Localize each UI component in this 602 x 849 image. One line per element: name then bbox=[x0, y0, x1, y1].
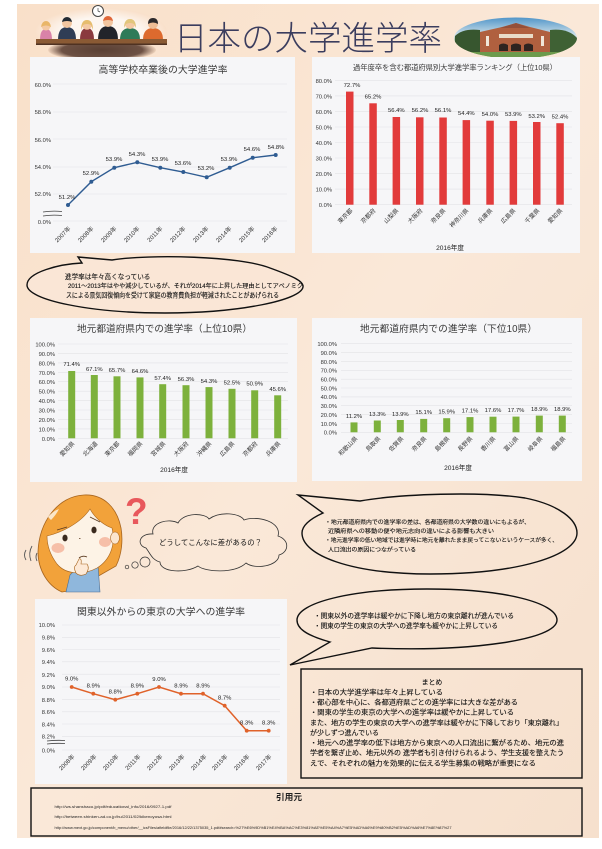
x axis labels: 2012年 bbox=[168, 225, 187, 244]
x axis labels: 愛知県 bbox=[58, 440, 76, 458]
y axis labels: 56.0% bbox=[35, 138, 51, 144]
panel: summary: えで、それぞれの魅力を効果的に伝える学生募集の戦略が重要になる bbox=[310, 758, 536, 768]
chart title: 過年度卒を含む都道府県別大学進学率ランキング（上位10県） bbox=[353, 63, 557, 72]
x axis labels: 2009年 bbox=[79, 753, 98, 772]
x axis labels: 2010年 bbox=[101, 753, 120, 772]
x axis labels: 鳥取県 bbox=[364, 435, 382, 453]
data labels: 72.7% bbox=[344, 83, 361, 89]
y axis labels: 8.8% bbox=[42, 698, 55, 704]
axis break mark bbox=[43, 211, 62, 216]
callout: regional differences: 人口流出の原因につながっている bbox=[328, 546, 416, 554]
data labels: 17.7% bbox=[508, 408, 525, 414]
y axis labels: 9.6% bbox=[42, 648, 55, 654]
x axis labels bbox=[336, 207, 564, 229]
y axis labels bbox=[317, 342, 337, 437]
x axis labels bbox=[337, 435, 567, 457]
y axis labels: 9.0% bbox=[42, 685, 55, 691]
data labels: 65.2% bbox=[365, 95, 382, 101]
x axis labels: 広島県 bbox=[218, 440, 236, 458]
y axis labels: 60.0% bbox=[39, 380, 55, 386]
x axis labels: 2008年 bbox=[76, 225, 95, 244]
x axis labels: 京都府 bbox=[241, 440, 259, 458]
x axis labels: 東京都 bbox=[103, 440, 121, 458]
data labels: 8.9% bbox=[174, 684, 188, 690]
y axis labels: 70.0% bbox=[39, 371, 55, 377]
y axis labels: 60.0% bbox=[321, 378, 337, 384]
y axis labels: 80.0% bbox=[321, 360, 337, 366]
y axis labels: 8.2% bbox=[42, 735, 55, 741]
x axis labels: 2016年 bbox=[232, 753, 251, 772]
y axis labels: 0.0% bbox=[319, 203, 332, 209]
x axis labels: 2015年 bbox=[210, 753, 229, 772]
people bbox=[40, 16, 163, 40]
data labels: 17.6% bbox=[485, 408, 502, 414]
y axis labels bbox=[35, 83, 51, 226]
data labels: 67.1% bbox=[86, 367, 103, 373]
panel: references: http://between.shinken-ad.co.jp/hu/2011/02/kikencyosa.html bbox=[54, 814, 172, 819]
data labels: 53.9% bbox=[106, 157, 123, 163]
data labels: 15.9% bbox=[438, 410, 456, 416]
blush bbox=[52, 543, 64, 553]
x axis labels: 和歌山県 bbox=[337, 435, 359, 457]
data labels: 56.1% bbox=[435, 108, 452, 114]
data labels: 52.9% bbox=[83, 171, 100, 177]
x axis labels: 千葉県 bbox=[523, 207, 541, 225]
data labels: 53.2% bbox=[198, 166, 215, 172]
y axis labels: 20.0% bbox=[316, 172, 332, 178]
illustration: thinking girl bbox=[24, 495, 122, 592]
x axis labels: 広島県 bbox=[499, 207, 517, 225]
panel: summary: また、地方の学生の東京の大学への進学率は緩やかに下降しており「東京離れ」 bbox=[310, 718, 563, 727]
data labels: 64.6% bbox=[132, 369, 149, 375]
y axis labels: 8.4% bbox=[42, 722, 55, 728]
callout: regional differences: ・地元都道府県内での進学率の差は、各都道府県の大学数の違いにもよるが、 bbox=[325, 518, 530, 526]
icon: clock bbox=[92, 6, 104, 16]
data labels bbox=[63, 362, 287, 393]
y axis labels: 100.0% bbox=[317, 342, 337, 348]
panel: references bbox=[31, 788, 582, 836]
x axis labels: 長野県 bbox=[456, 435, 474, 453]
data labels: 8.9% bbox=[196, 684, 210, 690]
illustration: university building bbox=[454, 17, 578, 59]
y axis labels: 9.2% bbox=[42, 673, 55, 679]
callout: regional differences: ・地元進学率の低い地域では進学時に地元を離れたまま戻ってこないというケースが多く、 bbox=[325, 536, 558, 544]
line series bbox=[70, 685, 271, 733]
x axis labels: 2014年 bbox=[214, 225, 233, 244]
hair bbox=[38, 495, 122, 592]
references heading: 引用元 bbox=[276, 791, 302, 802]
data labels: 18.9% bbox=[531, 407, 548, 413]
data labels: 53.9% bbox=[505, 112, 522, 118]
face bbox=[47, 509, 113, 573]
x axis labels: 富山県 bbox=[502, 435, 520, 453]
x axis labels: 福島県 bbox=[549, 435, 567, 453]
x axis labels: 2008年 bbox=[57, 753, 76, 772]
thought cloud: どうしてこんなに差があるの？ bbox=[159, 538, 262, 547]
chart title: 高等学校卒業後の大学進学率 bbox=[98, 63, 228, 76]
y axis labels: 40.0% bbox=[316, 141, 332, 147]
panel: references: http://ws.shanshaco.jp/pdf/educational_info/2016/0927-1.pdf bbox=[54, 804, 173, 809]
data labels: 53.9% bbox=[152, 157, 169, 163]
data labels: 9.0% bbox=[65, 676, 79, 682]
y axis labels: 10.0% bbox=[316, 188, 332, 194]
hand bbox=[74, 559, 88, 575]
y axis labels: 70.0% bbox=[321, 369, 337, 375]
panel: summary: まとめ bbox=[422, 678, 442, 686]
bars bbox=[68, 371, 281, 438]
panel: local enrollment bottom 10 bar chart bbox=[312, 318, 582, 481]
callout: Tokyo enrollment: ・関東の学生の東京の大学への進学率も緩やかに上昇している bbox=[314, 621, 498, 630]
y axis labels: 60.0% bbox=[316, 110, 332, 116]
x axis labels: 2011年 bbox=[123, 753, 142, 772]
callout: yearly trend: スによる景気回復傾向を受けて家庭の教育費負担が軽減されたことがあげられる bbox=[66, 290, 279, 300]
callout: regional differences: 近隣府県への移動の便や地元志向の違いによる影響も大きい bbox=[328, 527, 494, 535]
y axis labels: 90.0% bbox=[39, 352, 55, 358]
data labels: 54.6% bbox=[244, 147, 261, 153]
body bbox=[66, 566, 100, 592]
y axis labels: 40.0% bbox=[321, 395, 337, 401]
x axis labels: 2010年 bbox=[122, 225, 141, 244]
y axis labels: 0.0% bbox=[324, 431, 337, 437]
data labels: 54.3% bbox=[129, 152, 146, 158]
callout: yearly trend: 2011～2013年はやや減少しているが、それが2014年に上昇した理由としてアベノミク bbox=[68, 282, 303, 290]
chart title: 地元都道府県内での進学率（上位10県） bbox=[77, 322, 252, 335]
callout: yearly trend bbox=[27, 257, 303, 313]
data labels: 17.1% bbox=[462, 408, 479, 414]
y axis labels bbox=[39, 623, 55, 754]
x axis labels: 2013年 bbox=[167, 753, 186, 772]
panel: local enrollment top 10 bar chart bbox=[30, 318, 297, 482]
data labels: 9.0% bbox=[152, 677, 166, 683]
data labels: 8.3% bbox=[262, 720, 276, 726]
eyes bbox=[62, 535, 68, 541]
callout: Tokyo enrollment bbox=[290, 589, 557, 665]
y axis labels: 0.0% bbox=[42, 437, 55, 443]
data labels: 52.4% bbox=[552, 115, 569, 121]
panel: references: http://www.mext.go.jp/component/b_menu/other/__icsFiles/afieldfile/2016/12/22/1375035_1.pdf#search=%27%E6%9D%B1%E4%BA%AC%E3%81%AE%E5%A4%A7%E5%AD%A6%E9%80%B2%E5%AD%A6%E7%8E%87%27 bbox=[54, 825, 451, 830]
y axis labels: 10.0% bbox=[39, 427, 55, 433]
x axis labels: 兵庫県 bbox=[476, 207, 494, 225]
axis caption: 2016年度 bbox=[436, 243, 464, 252]
y axis labels: 50.0% bbox=[321, 386, 337, 392]
y axis labels bbox=[35, 342, 55, 443]
y axis labels: 9.4% bbox=[42, 660, 55, 666]
panel: summary: ・関東の学生の東京の大学への進学率は緩やかに上昇している bbox=[310, 708, 514, 716]
data labels: 56.2% bbox=[412, 108, 429, 114]
data labels bbox=[65, 676, 276, 726]
y axis labels: 10.0% bbox=[321, 422, 337, 428]
y axis labels: 8.6% bbox=[42, 710, 55, 716]
x axis labels bbox=[53, 225, 279, 244]
bars bbox=[350, 416, 566, 432]
x axis labels: 北海道 bbox=[81, 440, 99, 458]
data labels: 54.8% bbox=[268, 145, 285, 151]
data labels: 65.7% bbox=[109, 368, 126, 374]
data labels: 53.2% bbox=[528, 114, 546, 120]
panel: high school graduates line chart bbox=[30, 57, 295, 253]
data labels: 71.4% bbox=[63, 362, 81, 368]
chart title: 地元都道府県内での進学率（下位10県） bbox=[360, 322, 537, 335]
icon: question mark: ? bbox=[125, 491, 148, 532]
x axis labels: 香川県 bbox=[479, 435, 497, 453]
data labels: 8.7% bbox=[218, 696, 232, 702]
data labels bbox=[59, 145, 285, 201]
data labels: 56.4% bbox=[388, 108, 405, 114]
x axis labels: 2011年 bbox=[145, 225, 164, 244]
x axis labels: 福岡県 bbox=[126, 440, 144, 458]
x axis labels: 愛知県 bbox=[546, 207, 564, 225]
data labels: 50.9% bbox=[246, 382, 264, 388]
y axis labels: 70.0% bbox=[316, 94, 332, 100]
data labels: 13.9% bbox=[392, 412, 409, 418]
y axis labels: 40.0% bbox=[39, 399, 55, 405]
panel: summary: ・日本の大学進学率は年々上昇している bbox=[310, 688, 443, 696]
x axis labels: 兵庫県 bbox=[264, 440, 282, 458]
x axis labels: 神奈川県 bbox=[448, 207, 470, 229]
panel: prefecture ranking bar chart bbox=[312, 57, 580, 253]
panel: summary: が少しずつ進んでいる bbox=[310, 728, 379, 737]
x axis labels: 2016年 bbox=[260, 225, 279, 244]
x axis labels: 大阪府 bbox=[172, 440, 190, 458]
panel: summary: ・地元への進学率の低下は地方から東京への人口流出に繋がるため、地元の進 bbox=[310, 738, 564, 747]
axis caption: 2016年度 bbox=[444, 463, 472, 472]
x axis labels: 東京都 bbox=[336, 207, 354, 225]
axis caption: 2016年度 bbox=[160, 465, 188, 474]
x axis labels: 宮城県 bbox=[149, 440, 167, 458]
x axis labels bbox=[58, 440, 282, 458]
y axis labels: 90.0% bbox=[321, 351, 337, 357]
data labels: 54.0% bbox=[482, 112, 499, 118]
axis break mark bbox=[47, 740, 65, 744]
thought cloud bbox=[125, 514, 287, 571]
x axis labels: 2017年 bbox=[254, 753, 273, 772]
x axis labels bbox=[57, 753, 273, 772]
y axis labels: 60.0% bbox=[35, 83, 51, 89]
y axis labels: 80.0% bbox=[316, 79, 332, 85]
x axis labels: 島根県 bbox=[433, 435, 451, 453]
data labels bbox=[346, 407, 571, 420]
x axis labels: 岐阜県 bbox=[526, 435, 544, 453]
y axis labels: 30.0% bbox=[39, 408, 55, 414]
y axis labels: 50.0% bbox=[39, 390, 55, 396]
x axis labels: 2007年 bbox=[53, 225, 72, 244]
y axis labels: 10.0% bbox=[39, 623, 55, 629]
data labels: 8.9% bbox=[87, 684, 101, 690]
data labels: 8.9% bbox=[131, 684, 145, 690]
x axis labels: 大阪府 bbox=[406, 207, 424, 225]
y axis labels: 80.0% bbox=[39, 361, 55, 367]
data labels: 54.4% bbox=[458, 111, 475, 117]
y axis labels bbox=[316, 79, 332, 209]
data labels: 8.3% bbox=[240, 720, 254, 726]
x axis labels: 沖縄県 bbox=[195, 440, 213, 458]
data labels: 11.2% bbox=[346, 414, 363, 420]
line series bbox=[66, 153, 278, 207]
x axis labels: 2013年 bbox=[191, 225, 210, 244]
bars bbox=[346, 92, 564, 205]
panel: non-Kanto students line chart bbox=[35, 599, 287, 784]
y axis labels: 20.0% bbox=[321, 413, 337, 419]
x axis labels: 京都府 bbox=[359, 207, 377, 225]
data labels: 54.3% bbox=[201, 379, 218, 385]
data labels: 53.6% bbox=[175, 161, 192, 167]
chart title: 関東以外からの東京の大学への進学率 bbox=[77, 605, 245, 618]
callout: regional differences bbox=[298, 494, 577, 574]
x axis labels: 2012年 bbox=[145, 753, 164, 772]
title: 日本の大学進学率 bbox=[174, 21, 442, 58]
y axis labels: 9.8% bbox=[42, 636, 55, 642]
panel: summary: 学者を繋ぎ止め、地元以外の 進学者も引き付けられるよう、学生支援を整えたう bbox=[310, 748, 564, 757]
y axis labels: 20.0% bbox=[39, 418, 55, 424]
data labels: 56.3% bbox=[178, 377, 195, 383]
x axis labels: 2014年 bbox=[189, 753, 208, 772]
y axis labels: 58.0% bbox=[35, 110, 51, 116]
data labels: 52.5% bbox=[224, 380, 241, 386]
data labels: 53.9% bbox=[221, 157, 238, 163]
y axis labels: 52.0% bbox=[35, 192, 51, 198]
data labels: 45.6% bbox=[269, 387, 287, 393]
y axis labels: 30.0% bbox=[316, 156, 332, 162]
x axis labels: 佐賀県 bbox=[387, 435, 405, 453]
y axis labels: 30.0% bbox=[321, 404, 337, 410]
panel: summary bbox=[301, 669, 582, 778]
y axis labels: 0.0% bbox=[38, 220, 51, 226]
x axis labels: 奈良県 bbox=[429, 207, 447, 225]
data labels: 13.3% bbox=[369, 412, 386, 418]
data labels bbox=[344, 83, 569, 121]
data labels: 18.9% bbox=[554, 407, 571, 413]
x axis labels: 2009年 bbox=[99, 225, 118, 244]
callout: Tokyo enrollment: ・関東以外の進学率は緩やかに下降し地方の東京離れが進んでいる bbox=[314, 611, 514, 620]
data labels: 57.4% bbox=[154, 376, 172, 382]
data labels: 51.2% bbox=[59, 195, 76, 201]
y axis labels: 0.0% bbox=[42, 748, 55, 754]
callout: yearly trend: 進学率は年々高くなっている bbox=[65, 272, 150, 281]
panel: summary: ・都心部を中心に、各都道府県ごとの進学率には大きな差がある bbox=[310, 698, 518, 706]
data labels: 8.8% bbox=[109, 690, 123, 696]
x axis labels: 山梨県 bbox=[382, 207, 400, 225]
y axis labels: 54.0% bbox=[35, 165, 51, 171]
x axis labels: 2015年 bbox=[237, 225, 256, 244]
y axis labels: 100.0% bbox=[35, 342, 55, 348]
y axis labels: 50.0% bbox=[316, 126, 332, 132]
illustration: people around a table bbox=[35, 6, 167, 61]
x axis labels: 奈良県 bbox=[410, 435, 428, 453]
data labels: 15.1% bbox=[415, 410, 433, 416]
